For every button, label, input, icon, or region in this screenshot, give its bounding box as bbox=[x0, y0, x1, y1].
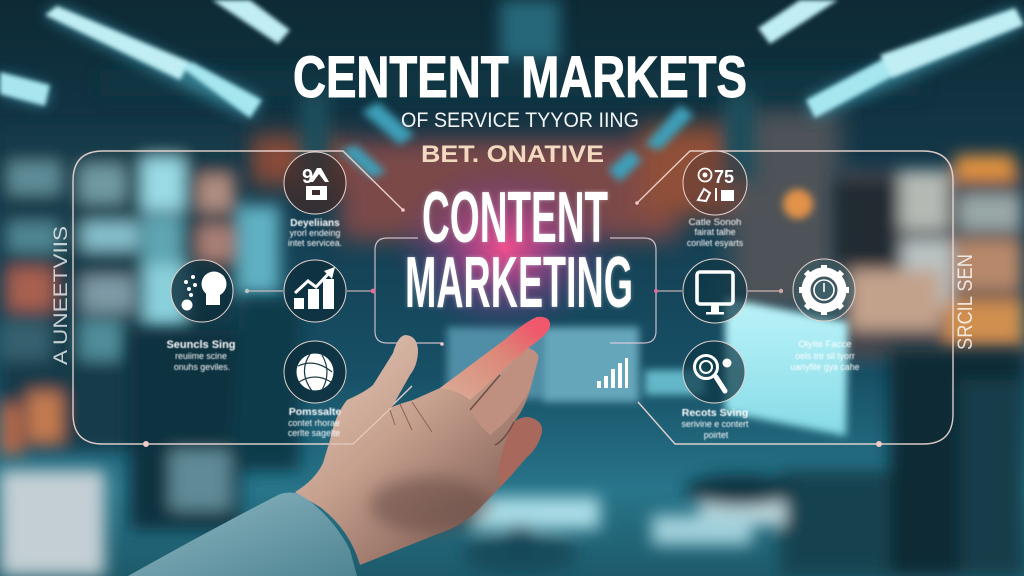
left outer frame bbox=[73, 151, 412, 444]
connector lines bbox=[245, 289, 783, 293]
background: orange lamp bbox=[783, 189, 813, 219]
text: right block bbox=[791, 339, 860, 372]
tagline: BET. ONATIVE bbox=[421, 141, 604, 168]
icon: gear bbox=[793, 259, 855, 321]
vertical label right: SRCIL SEN bbox=[954, 254, 977, 350]
pink glow behind centre title bbox=[390, 160, 620, 336]
text: bottom right block: Recots Sving bbox=[682, 407, 748, 419]
background: left bookshelves bbox=[0, 130, 280, 455]
text: bottom left block bbox=[288, 406, 341, 438]
vertical label left: A UNEETVIIS bbox=[51, 226, 72, 365]
icon: top left video box: 9 bbox=[302, 166, 313, 188]
text: top right block bbox=[687, 217, 744, 248]
small bar chart on monitor bbox=[597, 358, 628, 388]
text: bottom left block: cerlte sagelte bbox=[288, 428, 340, 438]
title: CENTENT MARKETS bbox=[293, 45, 747, 110]
background: right warm shelves bbox=[835, 155, 1024, 360]
background: dark chairs and desks bbox=[0, 300, 1024, 576]
text: middle left block: onuhs geviles. bbox=[174, 362, 230, 372]
finger gaps bbox=[470, 375, 514, 445]
text: right block: uanyfite gya cahe bbox=[791, 362, 860, 372]
text: middle left block bbox=[166, 339, 236, 372]
text: right block: Olyite Facce bbox=[798, 339, 852, 350]
text: top right block: Catle Sonoh bbox=[689, 217, 741, 228]
icon: rising bar chart bbox=[284, 260, 346, 322]
icon: globe bbox=[284, 341, 346, 403]
frame dots bbox=[143, 201, 882, 447]
hand with sleeve bbox=[128, 317, 550, 576]
text: top right block: fairat talhe bbox=[694, 227, 736, 237]
middle finger shading bbox=[470, 348, 538, 435]
ring finger warm tone bbox=[499, 417, 542, 487]
sleeve bbox=[128, 493, 357, 576]
text: bottom right block bbox=[682, 407, 749, 440]
icon: 75 badge bbox=[683, 151, 747, 215]
icon: head and dots bbox=[171, 260, 233, 322]
text: bottom right block: poirtet bbox=[704, 430, 729, 440]
background: ceiling beams bbox=[100, 0, 920, 180]
text: middle left block: Seuncls Sing bbox=[166, 339, 236, 351]
centre heading bbox=[405, 178, 633, 323]
centre heading: MARKETING bbox=[405, 243, 633, 323]
background: ceiling lights bbox=[0, 0, 1024, 118]
dark knuckle shade bbox=[370, 477, 490, 533]
background: secondary blue lights bbox=[340, 102, 694, 182]
palm crease lines bbox=[390, 402, 432, 432]
icon: top left video box bbox=[284, 152, 346, 214]
text: top left block: Deyeliians bbox=[290, 218, 340, 229]
right outer frame bbox=[637, 151, 953, 444]
text: right block: oels tre sil tyorr bbox=[795, 351, 855, 361]
palm and fingers bbox=[295, 317, 550, 565]
text: top right block: conllet esyarts bbox=[687, 238, 744, 248]
background: warm centre wall bbox=[250, 110, 840, 310]
background: ceiling light glow bbox=[0, 6, 1024, 118]
icon: magnifier bbox=[683, 341, 745, 403]
background: bright monitor bbox=[725, 298, 848, 436]
centre heading: CONTENT bbox=[422, 178, 608, 258]
subtitle: OF SERVICE TYYOR IING bbox=[401, 109, 639, 132]
frame over hand bbox=[330, 408, 391, 444]
text: top left block bbox=[288, 218, 342, 248]
text: bottom left block: contet rhorae bbox=[288, 418, 340, 428]
centre frame bbox=[375, 238, 656, 343]
text: middle left block: reuiime scine bbox=[175, 351, 227, 361]
icon: 75 badge: 75 bbox=[714, 167, 734, 187]
text: top left block: yrorl endeing bbox=[290, 228, 341, 238]
text: bottom right block: serivine e contert bbox=[682, 419, 749, 429]
background: centre monitors bbox=[447, 327, 705, 402]
icon: monitor bbox=[683, 259, 747, 323]
index finger with red tip bbox=[440, 317, 550, 400]
text: top left block: intet servicea. bbox=[288, 238, 342, 248]
text: bottom left block: Pomssalte bbox=[289, 406, 341, 418]
